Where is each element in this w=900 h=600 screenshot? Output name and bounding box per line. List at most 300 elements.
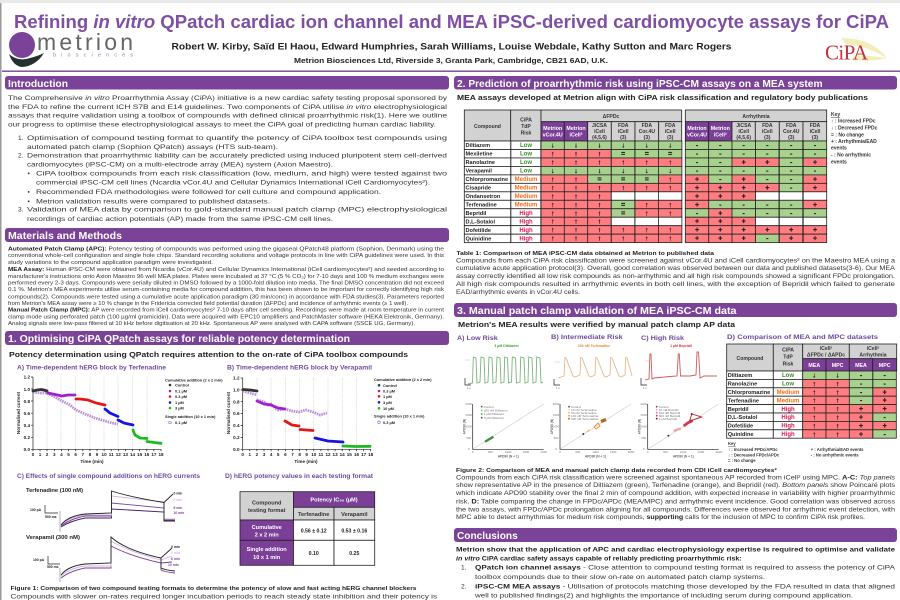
legend: Terfenadine chart: 0.3 µM (175, 394, 187, 399)
row: Terfenadine: ↑ (813, 398, 816, 405)
row: Diltiazem: - (743, 142, 746, 150)
text block: numbered aims: ▪ (28, 198, 30, 206)
text block: methods: Manual Patch Clamp (MPC): AP were recorded from iCell cardiomyocytes² 7-10 days after cell seeding. Recordings were made at room temperature in current (8, 307, 445, 313)
row: Ondansetron: ↑ (551, 193, 554, 200)
table: hERG potency values: Compound (252, 500, 282, 506)
caption: Figure 2: Figure 2: Comparison of MEA and manual patch clamp data recorded from CDI iCell cardiomyocytes² (456, 467, 777, 474)
row: Terfenadine (727, 396, 896, 405)
chart: Poincare plot low risk: 300 nM Diltiazem (484, 408, 508, 412)
chart: Poincare plot high risk: 1000 (680, 450, 687, 454)
row: Dofetilide: + (695, 227, 699, 234)
chart: time-dependent hERG block by Verapamil: 8 (298, 452, 301, 457)
chart: Poincare plot high risk: 1500 (698, 450, 705, 454)
legend: Terfenadine chart (165, 378, 223, 425)
legend: Verapamil chart (374, 377, 432, 425)
chart: time-dependent hERG block by Verapamil: 10 (311, 452, 317, 457)
row: Cisapride: ↑ (645, 185, 649, 192)
chart: Verapamil current traces: 6 min (171, 557, 180, 561)
row: Mexiletine: Low (520, 152, 532, 158)
row: Bepridil: + (859, 406, 863, 413)
row: Terfenadine: ↑ (836, 398, 839, 405)
row: D,L-Sotalol: High (519, 219, 533, 225)
table: hERG potency values: 0.56 ± 0.12 (301, 528, 327, 534)
row: Verapamil: ↓ (551, 168, 554, 175)
row: Ranolazine: ↑ (668, 159, 672, 166)
row: Diltiazem: ↓ (645, 142, 649, 150)
table: hERG potency values: Cumulative (252, 525, 282, 531)
chart: High risk AP trace (641, 344, 717, 390)
table: hERG potency values: 0.10 (309, 551, 319, 557)
table: hERG potency values: 2 x 2 min (255, 532, 279, 538)
row: Ranolazine: - (790, 159, 793, 166)
table: hERG potency values: testing format (248, 508, 285, 514)
row: Mexiletine: ↑ (551, 151, 554, 158)
row: Terfenadine: - (766, 202, 769, 209)
table header: Arrhythmia (859, 352, 887, 358)
chart: Poincare plot low risk: 0 (468, 447, 470, 451)
row: Chlorpromazine: = (597, 176, 602, 183)
row: Ranolazine: ↑ (574, 159, 578, 166)
row: Cisapride: ↑ (621, 185, 625, 192)
row: Quinidine: ↑ (813, 431, 816, 438)
table header: (4,5,6) (736, 135, 751, 141)
row: Bepridil: ↑ (668, 210, 672, 217)
chart: time-dependent hERG block by Verapamil (226, 376, 432, 464)
chart: time-dependent hERG block by Verapamil: 12 (325, 452, 331, 457)
row: Mexiletine: = (645, 151, 649, 158)
table header: iCell (594, 129, 605, 135)
row: Ranolazine: ↑ (551, 159, 554, 166)
row: Bepridil: ↑ (574, 210, 578, 217)
caption: Figure 2 (455, 467, 896, 521)
text block: methods: MEA Assay: Human iPSC-CM were obtained from Ncardia (vCor.4U) and Cellular Dynamics International (iCell cardiomyocytes²) and seeded according to (8, 267, 444, 273)
chart: Poincare plot low risk (463, 402, 547, 458)
table header: JiCSA (736, 123, 752, 129)
panel heading D comparison: D) Comparison of MEA and MPC datasets (727, 334, 879, 341)
table header: Compound (474, 124, 501, 130)
chart: High risk AP trace: 1 s (643, 386, 647, 390)
subheading: MEA assays: MEA assays developed at Metrion align with CiPA risk classification and regulatory body publications (457, 93, 868, 102)
table header: Risk (783, 362, 794, 368)
legend: table 1 key: - : No arrhythmic (831, 152, 871, 158)
chart: time-dependent hERG block by Terfenadine: 17 (151, 452, 157, 457)
legend: Verapamil chart: 3 µM (383, 400, 392, 405)
row: Dofetilide: High (781, 424, 795, 430)
row: Diltiazem: - (696, 142, 699, 150)
text block: numbered aims: Recommended FDA methodologies were followed for cell culture and compound application. (36, 189, 381, 196)
caption: Figure 2: risk. D: Table comparing the change in FPDc/APDc (MEA/MPC) and arrhythmic event incidence. Good correlation was observed across (456, 498, 895, 506)
row: Ondansetron: + (742, 193, 746, 200)
chart: Poincare plot intermediate risk: 1000 (553, 424, 560, 428)
text block: methods: from Metrion's MEA assay were ≥ 10 % change in the Fridericia corrected field potential duration (ΔFPDc) and incidence of arrhythmic events (≥ 1 well). (8, 301, 408, 307)
caption: Table 1: Table 1: Comparison of MEA iPSC-CM data obtained at Metrion to published data (456, 251, 715, 257)
row: Cisapride: + (695, 185, 699, 192)
chart: time-dependent hERG block by Verapamil: 14 (340, 452, 345, 457)
chart: time-dependent hERG block by Verapamil: 6 (284, 452, 287, 457)
text block: numbered aims: Validation of MEA data by comparison to gold-standard manual patch clamp (MPC) electrophysiological (27, 206, 448, 214)
table: MEA vs MPC comparison (727, 344, 897, 438)
text block: methods: manufacturer's instructions onto Axion Maestro 96 well MEA plates. Plates were incubated at 37 °C (5 % CO₂) for 7-10 days and 100 % medium exchanges were (8, 274, 444, 280)
legend: table D key: ↑ : Increased FPDc/APDc (728, 447, 778, 452)
row: Ranolazine: ↑ (836, 381, 839, 388)
row: Verapamil: - (814, 168, 817, 175)
legend: Terfenadine chart: 1 µM (175, 400, 184, 405)
row: Bepridil: - (743, 210, 746, 217)
chart: Low risk AP trace (465, 344, 543, 390)
chart: Verapamil current traces: 500 ms (47, 565, 59, 569)
row: Chlorpromazine: ↑ (668, 176, 672, 183)
row: Terfenadine: ↑ (645, 202, 649, 209)
row: Terfenadine: ↑ (574, 202, 578, 209)
table: hERG potency values (240, 492, 375, 565)
chart: time-dependent hERG block by Verapamil: 0.0 (233, 447, 240, 452)
row: Dofetilide: ↑ (813, 423, 816, 430)
chart: time-dependent hERG block by Verapamil: 11 (318, 452, 324, 457)
legend: table D key: + : Arrhythmia/EAD events (811, 447, 864, 452)
row: Bepridil: - (696, 210, 699, 217)
row: Ranolazine: + (813, 159, 817, 166)
row: Verapamil: - (719, 168, 722, 175)
chart: time-dependent hERG block by Terfenadine: 13 (123, 452, 128, 457)
row: Dofetilide: + (813, 227, 817, 234)
row: Terfenadine: - (790, 202, 793, 209)
panel: conclusions (454, 528, 897, 600)
row: Diltiazem: Low (520, 143, 532, 149)
authors: Robert W. Kirby, Saïd El Haou, Edward Humphries, Sarah Williams, Louise Webdale, Kathy Sutton and Marc Rogers (172, 42, 732, 52)
text block: conclusion points: well to published findings(2) and highlights the importance of including serum during compound application. (474, 592, 853, 600)
row: Chlorpromazine: = (645, 176, 649, 183)
row: Dofetilide: ↑ (574, 227, 578, 234)
row: Verapamil: Low (520, 169, 532, 175)
table header: iCell (762, 129, 773, 135)
chart: Verapamil current traces: 2 min (171, 551, 180, 555)
chart: Terfenadine current traces: Terfenadine (100 nM) (26, 488, 83, 494)
table header: (3) (812, 135, 818, 141)
chart: Intermediate risk AP trace: 1 s (556, 386, 560, 390)
text block: numbered aims: cardiomyocytes (iPSC-CM) on a multi-electrode array (MEA) system (Axion Maestro). (27, 162, 333, 168)
row: Dofetilide: Dofetilide (466, 228, 491, 234)
row: Chlorpromazine: - (860, 389, 863, 396)
row: Cisapride: + (718, 185, 722, 192)
legend: Verapamil chart: Cumulative addition (2 x 2 min) (374, 377, 432, 382)
chart: Poincare plot intermediate risk: 30 nM Terfenadine (571, 411, 597, 415)
chart: Poincare plot high risk: 1500 (640, 413, 647, 417)
chart: time-dependent hERG block by Verapamil: 0 (241, 452, 244, 457)
panel: introduction (5, 76, 449, 223)
chart: time-dependent hERG block by Verapamil: 17 (361, 452, 367, 457)
caption: Table 1 (456, 251, 896, 296)
table header: iCell (665, 129, 676, 135)
row: Mexiletine: - (766, 151, 769, 158)
chart: Poincare plot high risk: 2000 (640, 402, 647, 406)
table header: TdP (783, 354, 793, 360)
chart: Terfenadine current traces: 100 pA (30, 508, 42, 512)
table header: (3) (620, 135, 627, 141)
heading: Materials and Methods (5, 228, 449, 242)
row: D,L-Sotalol: D,L-Sotalol (728, 415, 758, 421)
row: Mexiletine: - (743, 151, 746, 158)
chart: Poincare plot intermediate risk: 1500 (610, 450, 617, 454)
row: Terfenadine: ↑ (551, 202, 554, 209)
row: Bepridil: Bepridil (466, 211, 487, 217)
row: Diltiazem (464, 141, 827, 150)
row: Dofetilide: + (718, 227, 722, 234)
row: Ondansetron: ↑ (574, 193, 578, 200)
text block: numbered aims: automated patch clamp (Sophion QPatch) assays (HTS sub-team). (27, 144, 278, 151)
heading: Conclusions (454, 528, 897, 542)
chart: Poincare plot intermediate risk: 100 nM Terfenadine (571, 414, 599, 418)
legend: Verapamil chart: 0.3 µM (383, 420, 395, 425)
table: hERG potency values: Verapamil (341, 512, 368, 518)
row: Chlorpromazine: ↑ (574, 176, 578, 183)
chart: Terfenadine current traces: 10 min (174, 511, 184, 515)
table header: FDA (665, 123, 676, 129)
chart: time-dependent hERG block by Terfenadine: 0.4 (24, 423, 30, 428)
legend: Terfenadine chart: 0.1 µM (175, 420, 187, 425)
row: Quinidine: ↑ (551, 236, 554, 243)
row: Mexiletine: Mexiletine (466, 152, 493, 158)
heading: section 3 (454, 303, 897, 317)
text block: methods: conventional whole-cell configuration and single hole chips. Standard recording solutions and voltage protocols in line with CiPA guidelines were used. In this (8, 253, 444, 259)
row: Mexiletine (464, 149, 827, 158)
chart: Poincare plot high risk: 100 nM Bepridil (659, 411, 681, 415)
row: Diltiazem: - (814, 142, 817, 150)
row: Cisapride: ↑ (551, 185, 554, 192)
chart: Poincare plot low risk: 1 µM Diltiazem (484, 412, 505, 416)
table header (464, 110, 827, 141)
chart: Low risk AP trace: 3 µM Diltiazem (494, 344, 519, 348)
row: Quinidine: Quinidine (466, 236, 491, 242)
row: D,L-Sotalol: - (884, 414, 887, 422)
table header: ΔFPDc (603, 114, 620, 120)
chart: time-dependent hERG block by Terfenadine: 14 (130, 452, 135, 457)
row: Chlorpromazine: Medium (777, 390, 799, 396)
chart: time-dependent hERG block by Verapamil: 2 (256, 452, 259, 457)
table header: FDA (762, 123, 773, 129)
row: Ondansetron: + (718, 193, 722, 200)
chart: time-dependent hERG block by Verapamil: 7 (291, 452, 294, 457)
chart: time-dependent hERG block by Verapamil: 4 (270, 452, 273, 457)
row: Terfenadine: + (813, 202, 817, 209)
text block: conclusion lead (456, 546, 895, 562)
chart: Poincare plot high risk: 0 (647, 450, 649, 454)
chart: time-dependent hERG block by Terfenadine: 8 (89, 452, 92, 457)
legend: table D key (728, 441, 864, 463)
table header: (3) (788, 135, 795, 141)
table header: CiPA (520, 118, 532, 124)
text block: conclusion points (461, 564, 896, 600)
chart: time-dependent hERG block by Terfenadine: 1.2 (24, 374, 30, 380)
panel: section 1 optimising CiPA QPatch assays (5, 331, 449, 600)
chart: time-dependent hERG block by Terfenadine: 18 (158, 452, 164, 457)
chart: time-dependent hERG block by Verapamil: 15 (347, 452, 352, 457)
panel heading A Low Risk: A) Low Risk (457, 335, 498, 342)
heading: section 2: 2. Prediction of proarrhythmic risk using iPSC-CM assays on a MEA system (457, 78, 822, 90)
table header: iCell (738, 129, 750, 135)
table: hERG potency values: Single addition (247, 547, 287, 553)
legend: table 1 key: ↓ : Decreased FPDc (831, 126, 878, 132)
text block: introduction paragraph: assays that require validation using a toolbox of compounds with defined clinical proarrhythmic risk(1). Here we outline (8, 112, 447, 120)
heading: section 3: 3. Manual patch clamp validation of MEA iPSC-CM data (457, 305, 737, 317)
chart: Poincare plot high risk: 300 nM Bepridil (659, 414, 681, 418)
chart: time-dependent hERG block by Verapamil: 0.4 (233, 423, 240, 428)
row: Bepridil: - (766, 210, 769, 217)
panel heading D: D) hERG potency values in each testing format (225, 473, 374, 480)
chart: Poincare plot high risk: 0 (643, 447, 645, 451)
row: D,L-Sotalol: + (742, 219, 746, 226)
row: D,L-Sotalol: ↑ (551, 219, 554, 226)
row: Quinidine: ↑ (668, 236, 672, 243)
chart: time-dependent hERG block by Terfenadine: 7 (82, 452, 85, 457)
text block: conclusion points: 1. (461, 564, 467, 572)
table header: Metrion (543, 126, 562, 132)
row: Chlorpromazine (727, 388, 896, 396)
table header: Metrion (687, 126, 707, 132)
legend: Terfenadine chart: Single addition (10 x 1 min) (165, 414, 216, 419)
row: Terfenadine: - (860, 398, 863, 405)
icon: CiPA logo (825, 38, 887, 64)
row: Mexiletine: - (696, 151, 699, 158)
chart: High risk AP trace: 1 µM Bepridil (670, 344, 692, 348)
legend: table D key: - : No arrhythmic events (811, 452, 859, 458)
row: Diltiazem (727, 371, 896, 380)
text block: methods: Automated Patch Clamp (APC): Potency testing of compounds was performed using the gigaseal QPatch48 platform (Sophion, Denmark) using the (8, 246, 444, 252)
row: Cisapride (464, 183, 827, 192)
row: Cisapride: ↑ (598, 185, 601, 192)
chart: Verapamil current traces (26, 535, 180, 582)
chart: Poincare plot intermediate risk: 2000 (553, 402, 560, 406)
row: Dofetilide: High (519, 228, 533, 234)
row: Quinidine: - (766, 236, 769, 243)
row: Chlorpromazine: + (883, 389, 887, 396)
row: Ranolazine: - (719, 159, 722, 166)
legend: table 1 key: Key (831, 112, 840, 118)
caption: Figure 2: which indicate APD90 stability over the final 2 min of compound addition, with expected increase in variability with higher proarrhythmic (455, 490, 895, 497)
table header: (3) (764, 135, 771, 141)
chart: time-dependent hERG block by Verapamil: 1.0 (233, 388, 240, 392)
row: Chlorpromazine: Chlorpromazine (466, 177, 508, 183)
table header: iCell² (714, 132, 727, 138)
table header: CiPA (782, 348, 794, 354)
row: D,L-Sotalol (464, 217, 827, 226)
legend: table D key: Key (728, 441, 736, 446)
text block: numbered aims: ▪ (28, 189, 30, 196)
row: Verapamil: - (696, 168, 699, 175)
chart: Poincare plot high risk: 1000 (640, 424, 647, 428)
row: Dofetilide: ↑ (598, 227, 601, 234)
row: Verapamil: ↓ (574, 168, 578, 175)
row: Dofetilide (464, 226, 827, 234)
row: Bepridil: + (718, 210, 722, 217)
chart: Poincare plot intermediate risk: 300 nM Terfenadine (571, 417, 599, 421)
row: Bepridil: ↑ (598, 210, 601, 217)
chart: Poincare plot intermediate risk: APD90 (N + 1) (585, 454, 606, 458)
chart: time-dependent hERG block by Terfenadine: 6 (74, 452, 77, 457)
icon: Metrion Biosciences logo: metrion (37, 29, 133, 55)
chart: Poincare plot high risk: APD90 (N) (638, 419, 642, 434)
row: Mexiletine: = (621, 151, 625, 158)
panel heading B Intermediate Risk: B) Intermediate Risk (551, 334, 623, 341)
chart: time-dependent hERG block by Terfenadine (16, 374, 223, 464)
row: Terfenadine: + (883, 398, 887, 405)
heading: Introduction: Introduction (8, 78, 68, 90)
chart: Poincare plot intermediate risk: 2000 (628, 450, 635, 454)
chart: time-dependent hERG block by Terfenadine: 0.6 (24, 411, 30, 416)
chart: Low risk AP trace: 1 s (467, 386, 471, 390)
legend: Verapamil chart: Single addition (10 x 1 min) (374, 414, 425, 418)
row: Chlorpromazine: + (813, 176, 817, 183)
table header: iCell (618, 129, 629, 135)
row: Mexiletine: ↑ (574, 151, 578, 158)
row: D,L-Sotalol: High (781, 415, 795, 421)
chart: Poincare plot low risk: 3 µM Diltiazem (484, 416, 505, 420)
row: Quinidine: Quinidine (728, 432, 753, 438)
row: Dofetilide: ↑ (621, 227, 625, 234)
row: Verapamil: - (790, 168, 793, 175)
row: Quinidine (464, 234, 827, 243)
row: Quinidine (727, 430, 896, 438)
chart: Poincare plot high risk: 500 (663, 450, 668, 454)
row: Cisapride: + (742, 185, 746, 192)
text block: conclusion points: 2. (461, 584, 467, 590)
text block: numbered aims (18, 135, 448, 223)
row: Chlorpromazine: - (790, 176, 793, 183)
row: Dofetilide: + (742, 227, 746, 234)
chart: Poincare plot high risk: Control (659, 405, 669, 409)
row: Verapamil: ↓ (621, 168, 625, 175)
chart: time-dependent hERG block by Terfenadine: 11 (109, 452, 114, 457)
row: D,L-Sotalol: + (695, 219, 699, 226)
legend: Verapamil chart: 0.3 µM (383, 388, 395, 394)
table header: vCor.4U (543, 132, 563, 138)
chart: time-dependent hERG block by Terfenadine: 2 (46, 452, 49, 457)
table: hERG potency values: 0.53 ± 0.16 (341, 528, 367, 534)
chart: time-dependent hERG block by Terfenadine: 9 (96, 452, 99, 457)
chart: time-dependent hERG block by Terfenadine: 5 (67, 452, 70, 457)
text block: numbered aims: Optimisation of compound testing format to quantify the potency of CiPA toolbox test compounds using (27, 135, 448, 142)
text block: numbered aims: 3. (18, 206, 24, 214)
text block: methods: 0.1 %. Metrion's MEA experiments utilise serum-containing media for compound addition, this has been shown to be important for correctly identifying high risk (8, 287, 444, 293)
row: Quinidine: + (718, 236, 722, 243)
row: Dofetilide: + (859, 423, 863, 430)
chart: Poincare plot high risk: 500 (641, 436, 647, 440)
row: Terfenadine: Medium (515, 202, 537, 208)
chart: Poincare plot intermediate risk: 0 (559, 450, 561, 454)
subheading: verified by MPC: Metrion's MEA results were verified by manual patch clamp AP data (458, 320, 736, 329)
caption: Table 1: cumulative acute application protocol(3). Overall, good correlation was observed between our data and published datasets(3-6). Our MEA (456, 265, 896, 272)
chart: Poincare plot high risk: 10 nM Bepridil (659, 408, 679, 412)
chart: Terfenadine current traces (26, 488, 184, 532)
chart: time-dependent hERG block by Verapamil: Time (min) (294, 459, 318, 464)
chart: time-dependent hERG block by Terfenadine: 1.0 (24, 387, 30, 392)
row: Mexiletine: - (790, 151, 793, 158)
row: Mexiletine: ↑ (598, 151, 601, 158)
chart: Poincare plot high risk: APD90 (N + 1) (673, 454, 694, 458)
caption: Table 1: EAD/arrhythmic events in vCor.4U cells. (456, 289, 580, 296)
row: Bepridil: ↑ (645, 210, 649, 217)
legend: Verapamil chart: 10 µM (383, 406, 394, 411)
text block: introduction paragraph: The Comprehensive in vitro Proarrhythmia Assay (CiPA) initiative is a new cardiac safety testing proposal sponsored by (8, 95, 448, 102)
row: Chlorpromazine: Chlorpromazine (728, 390, 770, 396)
text block: methods: study variations to the compound application paradigm were investigated. (8, 260, 213, 266)
legend: Terfenadine chart: 0.1 µM (175, 388, 187, 394)
row: Chlorpromazine: ↑ (813, 389, 816, 396)
row: Cisapride: ↑ (668, 185, 672, 192)
caption: Figure 2: the two assays, with FPDc/APDc prolongation aligning for all compounds. Differences were observed for arrhythmic event detection, with (456, 506, 896, 514)
row: Bepridil: Bepridil (728, 407, 749, 413)
legend: Verapamil chart: Control (383, 383, 397, 388)
legend: Verapamil chart: 1 µM (383, 394, 392, 399)
